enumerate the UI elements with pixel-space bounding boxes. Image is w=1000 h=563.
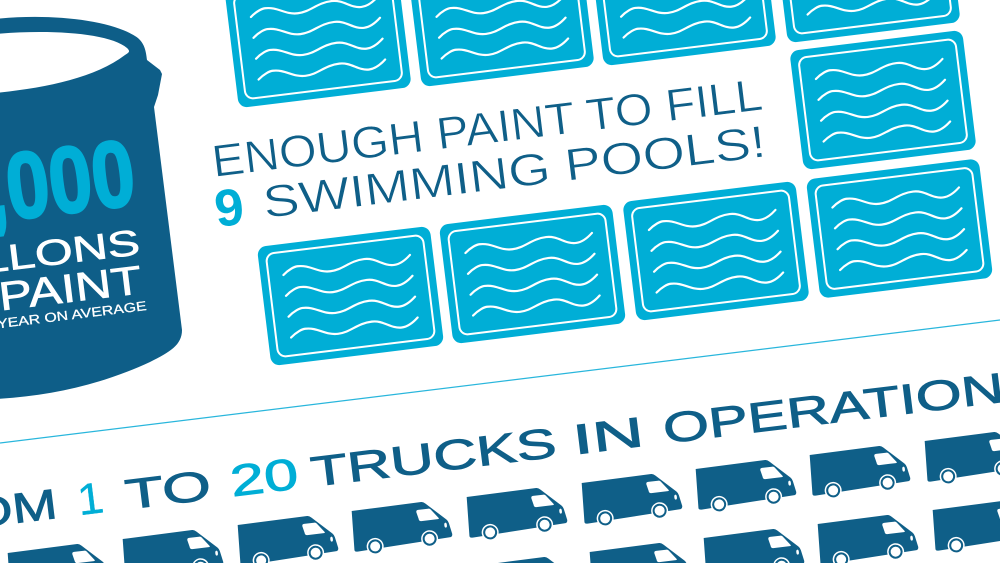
pools headline: ENOUGH PAINT TO FILL [209,69,765,187]
trucks headline: 1 [75,473,106,525]
trucks headline: OPERATION [660,364,1000,452]
trucks headline: TO [122,461,214,518]
swimming pools pictogram [224,0,993,366]
trucks pictogram [6,429,1000,563]
pools headline: SWIMMING POOLS! [260,116,768,228]
trucks headline: 20 [228,449,301,506]
paint bucket [0,17,182,399]
pools headline [209,69,768,239]
trucks headline [0,363,1000,547]
trucks headline: IN [570,408,646,463]
trucks headline: TRUCKS [308,419,559,496]
pools headline: 9 [211,178,247,239]
